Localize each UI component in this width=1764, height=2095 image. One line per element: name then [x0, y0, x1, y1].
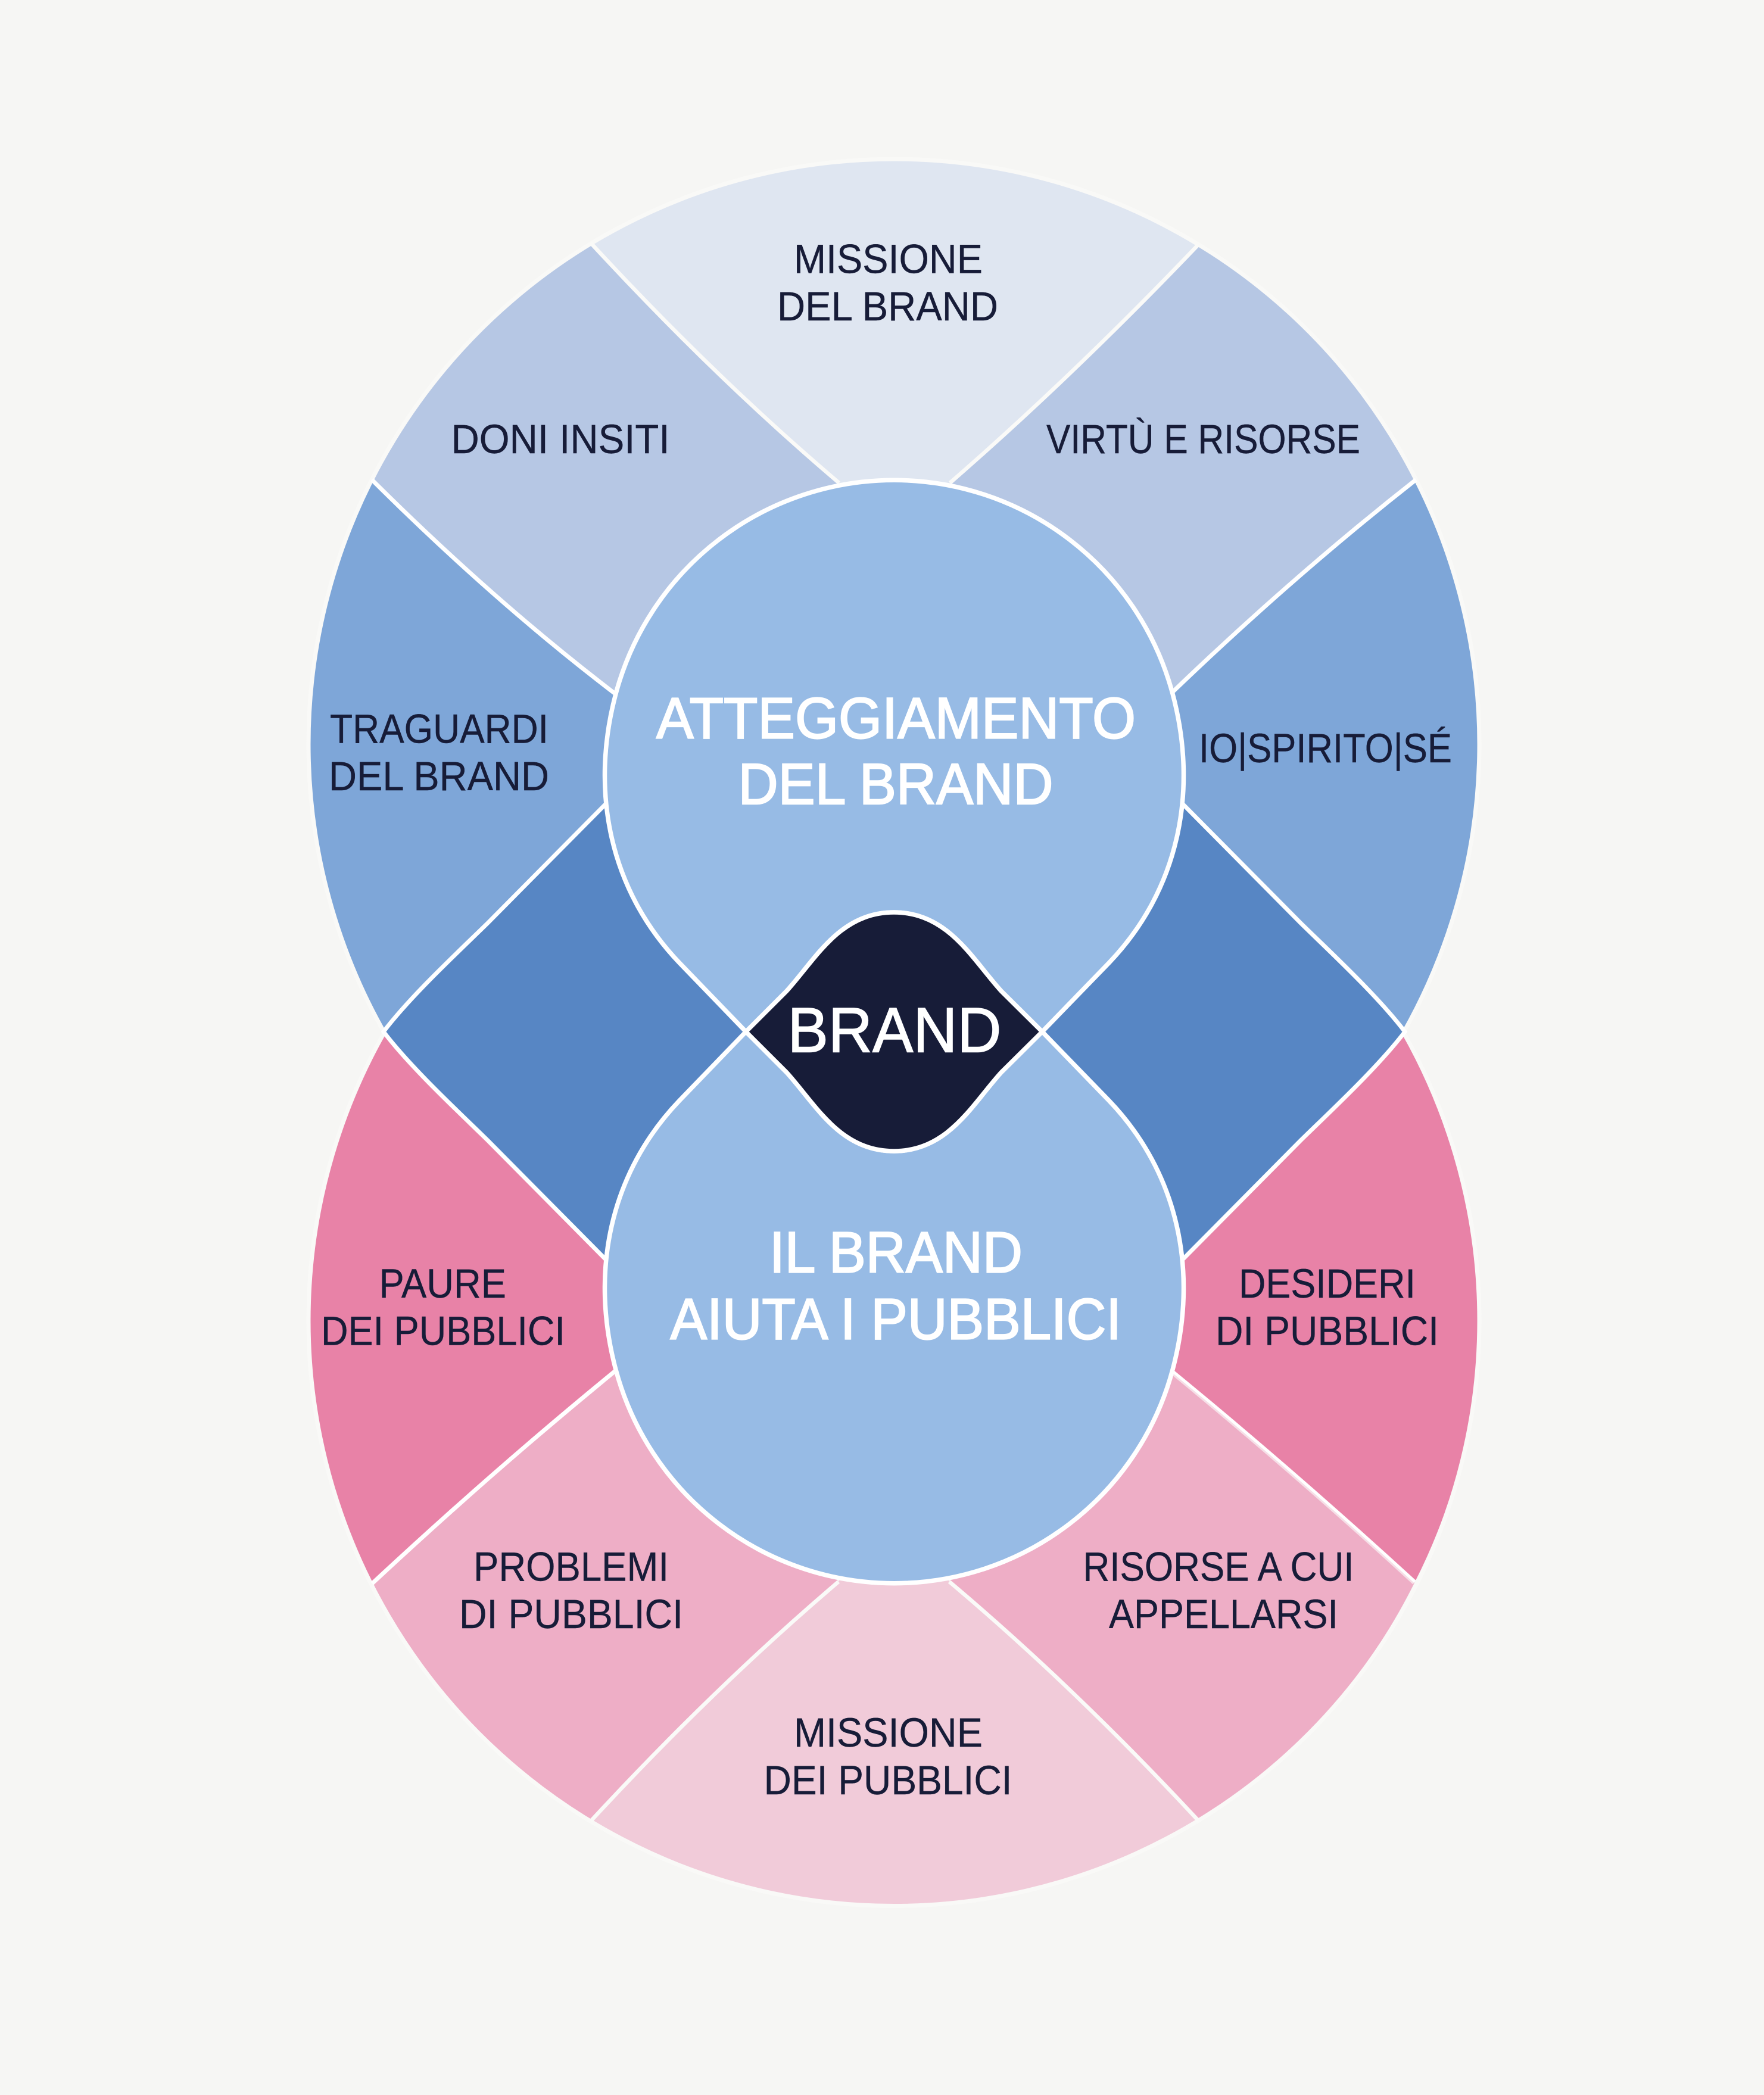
panel: virtù e risorse: VIRTÙ E RISORSE — [1046, 416, 1360, 462]
panel: dark blue left overlap — [384, 796, 774, 1267]
panel: atteggiamento del brand — [604, 480, 1184, 1031]
panel: paure dei pubblici: DEI PUBBLICI — [321, 1308, 565, 1354]
panel: brand core: BRAND — [787, 994, 1002, 1066]
panel: desideri di pubblici — [1132, 1031, 1479, 1582]
panel: dark blue right overlap — [1012, 796, 1405, 1267]
panel: atteggiamento del brand: ATTEGGIAMENTO — [656, 686, 1136, 750]
panel: problemi di pubblici: DI PUBBLICI — [459, 1591, 683, 1637]
panel: missione dei pubblici: MISSIONE — [794, 1710, 983, 1756]
panel: problemi di pubblici — [372, 1371, 839, 1821]
panel: traguardi del brand — [308, 480, 655, 1031]
panel: virtù e risorse — [950, 245, 1416, 693]
panel: doni insiti — [372, 243, 839, 694]
panel: risorse a cui appellarsi: APPELLARSI — [1109, 1591, 1338, 1637]
outer outline — [308, 159, 1479, 1906]
panel: il brand aiuta i pubblici — [604, 1031, 1184, 1583]
panel: desideri di pubblici: DI PUBBLICI — [1216, 1308, 1439, 1354]
panel: paure dei pubblici: PAURE — [379, 1261, 506, 1307]
panel: doni insiti: DONI INSITI — [451, 416, 669, 462]
panel: il brand aiuta i pubblici: AIUTA I PUBBLICI — [671, 1286, 1121, 1352]
panel: risorse a cui appellarsi — [949, 1371, 1415, 1820]
panel: traguardi del brand: DEL BRAND — [329, 753, 549, 799]
panel: atteggiamento del brand: DEL BRAND — [738, 752, 1053, 816]
panel: missione dei pubblici: DEI PUBBLICI — [763, 1757, 1012, 1803]
panel: missione del brand: MISSIONE — [794, 236, 983, 282]
panel: missione dei pubblici — [591, 1489, 1198, 1906]
panel: brand core — [746, 912, 1042, 1151]
panel: io spirito sé: IO|SPIRITO|SÉ — [1199, 725, 1452, 771]
panel: missione del brand: DEL BRAND — [777, 283, 998, 329]
panel: risorse a cui appellarsi: RISORSE A CUI — [1083, 1544, 1354, 1590]
panel: problemi di pubblici: PROBLEMI — [473, 1544, 669, 1590]
panel: il brand aiuta i pubblici: IL BRAND — [769, 1220, 1023, 1285]
panel: io spirito sé — [1132, 480, 1480, 1031]
panel: missione del brand — [591, 159, 1198, 596]
panel: desideri di pubblici: DESIDERI — [1239, 1261, 1416, 1307]
panel: paure dei pubblici — [308, 1031, 655, 1583]
panel: traguardi del brand: TRAGUARDI — [330, 706, 548, 752]
